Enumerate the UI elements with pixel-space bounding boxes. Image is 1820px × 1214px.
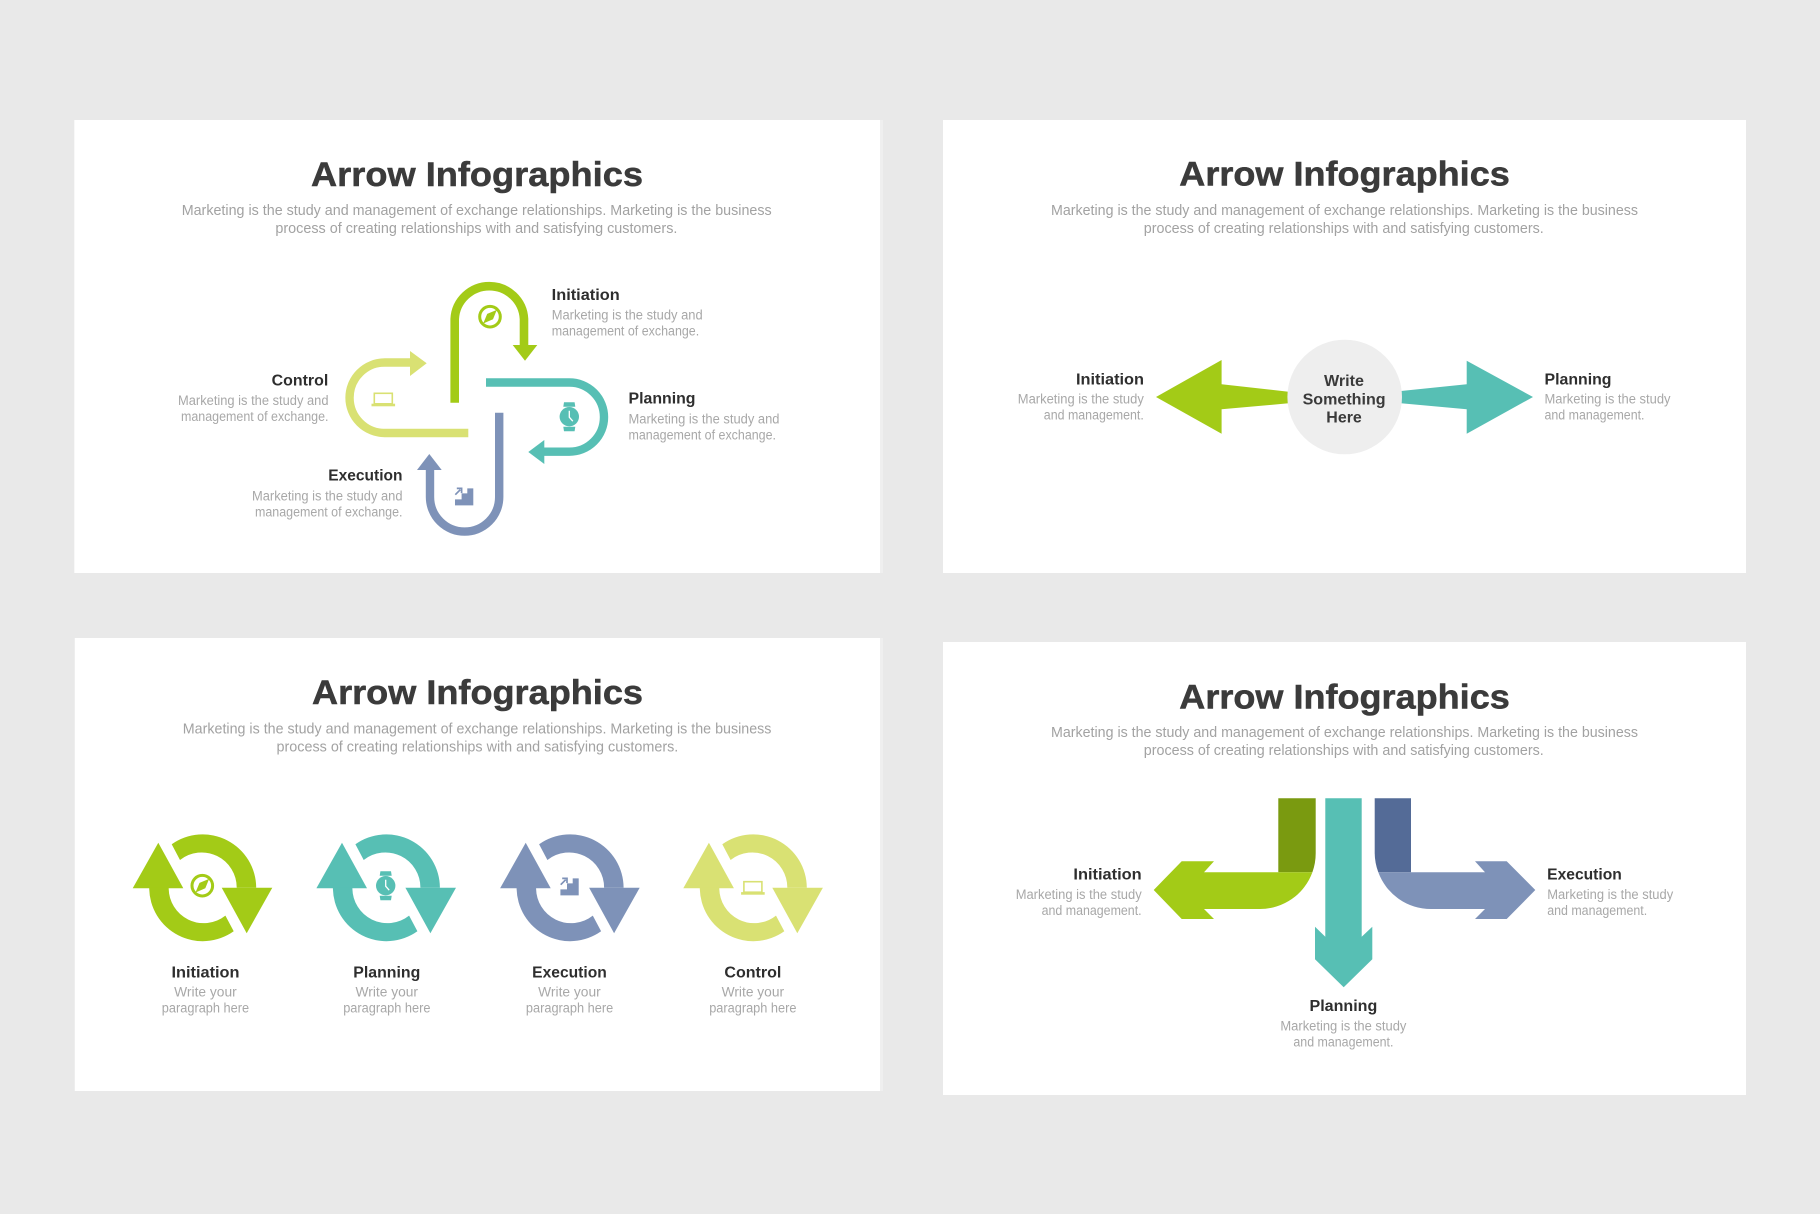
label: execution: and management. <box>1547 903 1647 918</box>
label: execution: Marketing is the study and <box>252 488 402 503</box>
arrow: blue execution loop <box>417 413 499 532</box>
label: control <box>709 965 796 1016</box>
icon: compass <box>192 875 213 896</box>
icon: watch <box>376 871 395 900</box>
label: planning: and management. <box>1293 1035 1393 1050</box>
label: execution <box>252 468 402 519</box>
subtitle text <box>1051 203 1638 237</box>
label: control: Marketing is the study and <box>178 393 328 408</box>
arrow: green left <box>1156 360 1288 434</box>
icon: laptop <box>372 393 395 406</box>
label: initiation: Initiation <box>172 965 240 982</box>
center circle: Here <box>1326 410 1362 427</box>
subtitle text: Marketing is the study and management of exchange relationships. Marketing is the business <box>183 721 771 737</box>
cycle arrow: execution <box>500 834 640 941</box>
label: initiation <box>1018 372 1144 423</box>
label: planning <box>628 390 780 442</box>
arrow: teal planning loop <box>486 382 604 464</box>
label: initiation: and management. <box>1044 408 1144 423</box>
arrow: yellow control loop <box>350 351 468 433</box>
panel: two-way arrows <box>943 120 1746 573</box>
subtitle text: process of creating relationships with and satisfying customers. <box>276 739 678 755</box>
icon: watch <box>560 402 579 431</box>
center circle: Something <box>1303 392 1386 409</box>
subtitle text: process of creating relationships with and satisfying customers. <box>1144 221 1544 237</box>
subtitle text <box>182 203 772 237</box>
cycle arrow: control <box>683 834 823 941</box>
subtitle text: Marketing is the study and management of exchange relationships. Marketing is the business <box>182 203 772 219</box>
label: planning: Marketing is the study <box>1544 392 1671 407</box>
label: initiation <box>1016 866 1142 918</box>
label: initiation: and management. <box>1042 903 1142 918</box>
subtitle text <box>183 721 771 755</box>
arrow: green bent left <box>1154 798 1316 919</box>
icon: compass <box>480 306 500 327</box>
heading: Arrow Infographics <box>311 156 643 194</box>
label: initiation: Initiation <box>1076 372 1144 389</box>
icon: stairs <box>560 878 579 895</box>
cycle arrow: planning <box>316 834 456 941</box>
label: initiation: Marketing is the study <box>1018 392 1144 407</box>
label: execution <box>526 965 613 1016</box>
label: planning: Marketing is the study <box>1280 1019 1407 1034</box>
arrow: green initiation loop <box>455 286 537 403</box>
arrow: blue bent right <box>1375 798 1535 919</box>
center circle <box>1287 340 1402 454</box>
heading: Arrow Infographics <box>1179 156 1510 194</box>
subtitle text: process of creating relationships with and satisfying customers. <box>275 221 677 237</box>
subtitle text: Marketing is the study and management of exchange relationships. Marketing is the business <box>1051 725 1638 741</box>
label: initiation: management of exchange. <box>552 323 699 338</box>
label: initiation: Initiation <box>552 287 620 304</box>
label: execution: Write your <box>538 985 601 1000</box>
label: planning: and management. <box>1544 408 1644 423</box>
label: initiation: Marketing is the study and <box>552 307 703 322</box>
label: initiation: Initiation <box>1073 866 1142 883</box>
subtitle text: process of creating relationships with and satisfying customers. <box>1144 743 1544 759</box>
label: planning: management of exchange. <box>628 427 776 442</box>
label: execution <box>1547 866 1673 918</box>
label: control <box>178 372 328 424</box>
label: planning: Marketing is the study and <box>628 411 780 426</box>
panel: circular loop arrows <box>74 120 883 573</box>
cycle arrow: initiation <box>133 834 272 941</box>
subtitle text: Marketing is the study and management of exchange relationships. Marketing is the business <box>1051 203 1638 219</box>
label: planning: Write your <box>356 985 419 1000</box>
label: planning: Planning <box>1310 998 1377 1015</box>
label: planning: Planning <box>353 965 420 982</box>
label: control: Write your <box>722 985 785 1000</box>
label: initiation: paragraph here <box>162 1001 249 1016</box>
label: execution: Marketing is the study <box>1547 887 1673 902</box>
subtitle text <box>1051 725 1638 759</box>
label: execution: management of exchange. <box>255 504 402 519</box>
heading: Arrow Infographics <box>312 674 643 712</box>
arrow: teal straight down <box>1315 798 1372 987</box>
label: initiation <box>162 965 249 1016</box>
center circle: Write <box>1324 373 1364 390</box>
label: planning: Planning <box>1544 372 1612 389</box>
label: planning <box>343 965 430 1016</box>
label: planning <box>1280 998 1407 1050</box>
label: initiation: Marketing is the study <box>1016 887 1142 902</box>
label: execution: Execution <box>532 965 607 982</box>
arrow: teal right <box>1401 361 1533 434</box>
label: initiation: Write your <box>174 985 237 1000</box>
panel: cycle arrows <box>75 638 883 1091</box>
icon: stairs <box>455 488 473 505</box>
label: control: Control <box>272 372 328 389</box>
label: planning: Planning <box>628 390 696 407</box>
heading: Arrow Infographics <box>1179 678 1510 716</box>
label: execution: Execution <box>1547 866 1622 883</box>
panel: three-way bent arrows <box>943 642 1746 1095</box>
label: planning <box>1544 372 1671 423</box>
label: control: Control <box>724 965 781 982</box>
icon: laptop <box>741 882 765 895</box>
label: execution: Execution <box>328 468 402 485</box>
label: control: paragraph here <box>709 1001 796 1016</box>
label: execution: paragraph here <box>526 1001 613 1016</box>
label: control: management of exchange. <box>181 409 328 424</box>
label: planning: paragraph here <box>343 1001 430 1016</box>
label: initiation <box>552 287 703 338</box>
